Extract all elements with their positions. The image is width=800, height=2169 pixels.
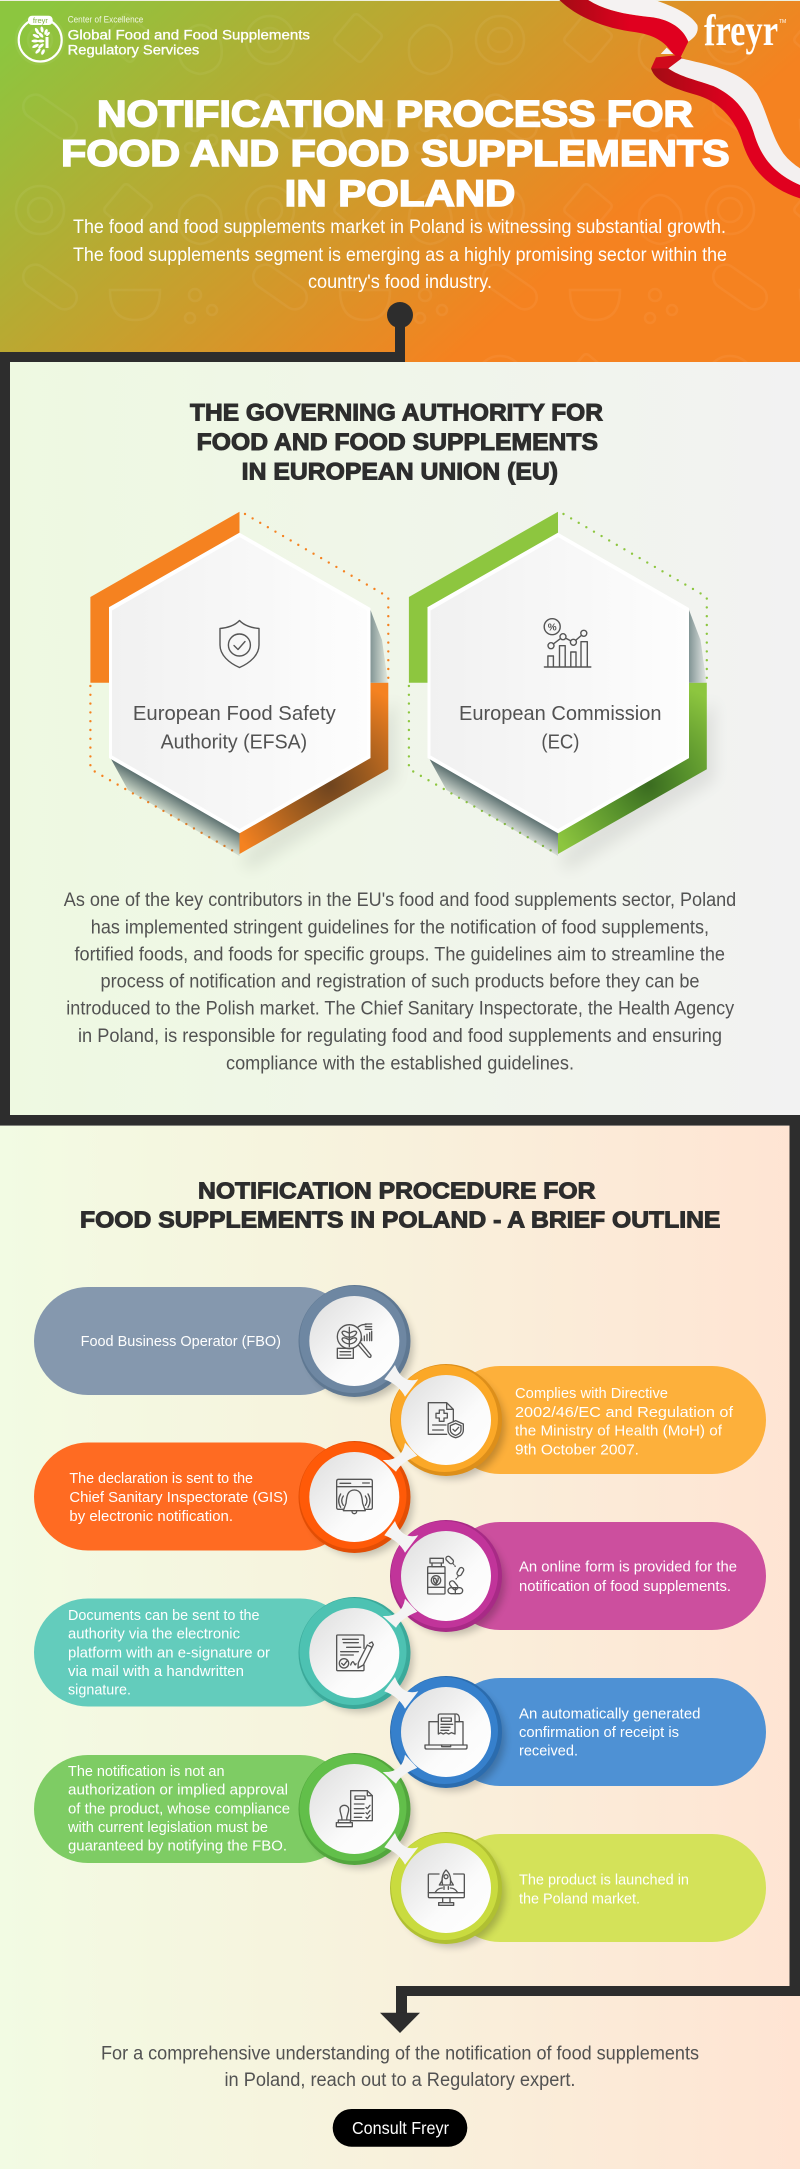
text: by electronic notification. xyxy=(69,1508,233,1525)
text: Documents can be sent to the xyxy=(68,1607,260,1624)
icon: supplement bottle and pills xyxy=(428,1555,465,1594)
text: Complies with Directive xyxy=(515,1385,668,1402)
text: Food Business Operator (FBO) xyxy=(81,1333,281,1350)
paragraph: Poland guidelines: process of notification and registration of such products before they can be xyxy=(100,971,700,992)
text: The notification is not an xyxy=(68,1763,224,1780)
text: of the product, whose compliance xyxy=(68,1800,290,1817)
hexagon: EFSA xyxy=(90,512,396,870)
freyr logo: freyr xyxy=(704,6,778,55)
icon: chart with percent xyxy=(544,619,591,667)
text: via mail with a handwritten xyxy=(68,1663,244,1680)
label: European Commission: European Commission xyxy=(459,702,662,725)
icon: signed document xyxy=(337,1635,373,1671)
paragraph: Poland guidelines xyxy=(64,890,736,1074)
polish flag ribbon xyxy=(559,0,800,198)
text: The product is launched in xyxy=(519,1871,689,1888)
connector line from header to panel xyxy=(0,302,800,1126)
icon: browser with bell xyxy=(337,1479,372,1514)
step 8: product launched xyxy=(390,1832,766,1947)
label: European Commission xyxy=(459,702,662,753)
step 6: confirmation of receipt xyxy=(390,1676,766,1791)
paragraph: Poland guidelines: in Poland, is responsible for regulating food and food supplements and ensuring xyxy=(78,1026,722,1047)
heading: governing authority: FOOD AND FOOD SUPPLEMENTS xyxy=(197,429,598,456)
icon: laptop with receipt xyxy=(425,1714,467,1749)
text xyxy=(519,1705,700,1760)
text: An automatically generated xyxy=(519,1705,700,1722)
intro text: The food supplements segment is emerging as a highly promising sector within the xyxy=(73,244,727,266)
text: confirmation of receipt is xyxy=(519,1724,679,1741)
text: authorization or implied approval xyxy=(68,1782,288,1799)
hexagon: European Commission xyxy=(409,512,714,870)
text xyxy=(68,1607,270,1699)
text: with current legislation must be xyxy=(67,1819,268,1836)
step 4: online form xyxy=(390,1520,766,1635)
text: received. xyxy=(519,1743,578,1760)
heading: notification procedure xyxy=(80,1177,720,1233)
text: 9th October 2007. xyxy=(515,1441,639,1458)
text: The declaration is sent to the xyxy=(69,1470,253,1487)
icon: shield xyxy=(220,620,259,668)
intro text: country's food industry. xyxy=(308,271,492,293)
panel: notification procedure xyxy=(0,1125,800,2169)
text xyxy=(69,1470,288,1525)
logo text: global food and food supplements regulatory services: Regulatory Services xyxy=(68,41,199,57)
icon: document with shield xyxy=(428,1403,463,1438)
icon: chart with percent: % xyxy=(548,622,557,634)
icon: stamp and checklist xyxy=(336,1791,372,1827)
connectors between steps xyxy=(383,1365,418,1865)
heading: governing authority xyxy=(190,400,603,485)
paragraph: Poland guidelines: introduced to the Polish market. The Chief Sanitary Inspectorate, the Health Agency xyxy=(66,999,735,1020)
text xyxy=(519,1871,689,1907)
text: the Ministry of Health (MoH) of xyxy=(515,1423,723,1440)
title: FOOD AND FOOD SUPPLEMENTS xyxy=(61,133,730,174)
text xyxy=(515,1385,734,1458)
button: consult freyr: Consult Freyr xyxy=(352,2118,449,2138)
title: NOTIFICATION PROCESS FOR xyxy=(97,94,693,135)
intro text xyxy=(73,216,727,293)
step 7: notification is not approval xyxy=(34,1753,413,1868)
text: guaranteed by notifying the FBO. xyxy=(68,1838,287,1855)
text xyxy=(519,1559,737,1595)
text: notification of food supplements. xyxy=(519,1578,731,1595)
step 5: documents sent xyxy=(34,1597,413,1712)
label: EFSA xyxy=(133,702,337,753)
title xyxy=(61,94,730,214)
heading: notification procedure: NOTIFICATION PROCEDURE FOR xyxy=(198,1177,596,1203)
heading: governing authority: THE GOVERNING AUTHORITY FOR xyxy=(190,400,603,427)
icon: monitor with rocket xyxy=(428,1870,464,1905)
text: An online form is provided for the xyxy=(519,1559,737,1576)
logo text: global food and food supplements regulatory services: Global Food and Food Supplements xyxy=(68,26,310,42)
paragraph: Poland guidelines: has implemented stringent guidelines for the notification of food supplements, xyxy=(91,917,709,938)
step 2: complies with directive xyxy=(390,1364,766,1479)
logo text: global food and food supplements regulatory services xyxy=(68,15,310,57)
step 1: food business operator xyxy=(34,1285,413,1400)
logo: centre of excellence badge xyxy=(19,16,62,61)
logo: centre of excellence badge: freyr xyxy=(33,16,48,25)
step 3: declaration sent xyxy=(34,1441,413,1556)
heading: notification procedure: FOOD SUPPLEMENTS IN POLAND - A BRIEF OUTLINE xyxy=(80,1207,720,1233)
paragraph: Poland guidelines: compliance with the established guidelines. xyxy=(226,1053,574,1074)
title: IN POLAND xyxy=(285,173,515,214)
text: 2002/46/EC and Regulation of xyxy=(515,1404,734,1421)
closing text xyxy=(101,2043,699,2091)
freyr logo: TM xyxy=(779,19,786,25)
text: signature. xyxy=(68,1682,131,1699)
text: authority via the electronic xyxy=(68,1626,240,1643)
paragraph: Poland guidelines: As one of the key contributors in the EU's food and food supplements sector, Poland xyxy=(64,890,736,911)
panel: header xyxy=(0,0,800,362)
label: EFSA: European Food Safety xyxy=(133,702,337,725)
panel: governing authority xyxy=(0,302,800,1126)
logo text: global food and food supplements regulatory services: Center of Excellence xyxy=(68,15,143,25)
closing text: For a comprehensive understanding of the notification of food supplements xyxy=(101,2043,699,2064)
closing text: in Poland, reach out to a Regulatory expert. xyxy=(224,2070,576,2091)
heading: governing authority: IN EUROPEAN UNION (EU) xyxy=(242,458,558,485)
text: the Poland market. xyxy=(519,1890,640,1907)
icon: magnifier over wheat xyxy=(337,1324,372,1358)
intro text: The food and food supplements market in Poland is witnessing substantial growth. xyxy=(73,216,726,238)
text: platform with an e-signature or xyxy=(68,1644,270,1661)
text: Chief Sanitary Inspectorate (GIS) xyxy=(69,1489,288,1506)
arrow: to call to action xyxy=(380,1125,800,2033)
text xyxy=(67,1763,290,1855)
label: EFSA: Authority (EFSA) xyxy=(161,730,307,753)
paragraph: Poland guidelines: fortified foods, and foods for specific groups. The guidelines aim to streamline the xyxy=(74,944,725,965)
label: European Commission: (EC) xyxy=(541,730,580,753)
button: consult freyr xyxy=(333,2109,467,2147)
